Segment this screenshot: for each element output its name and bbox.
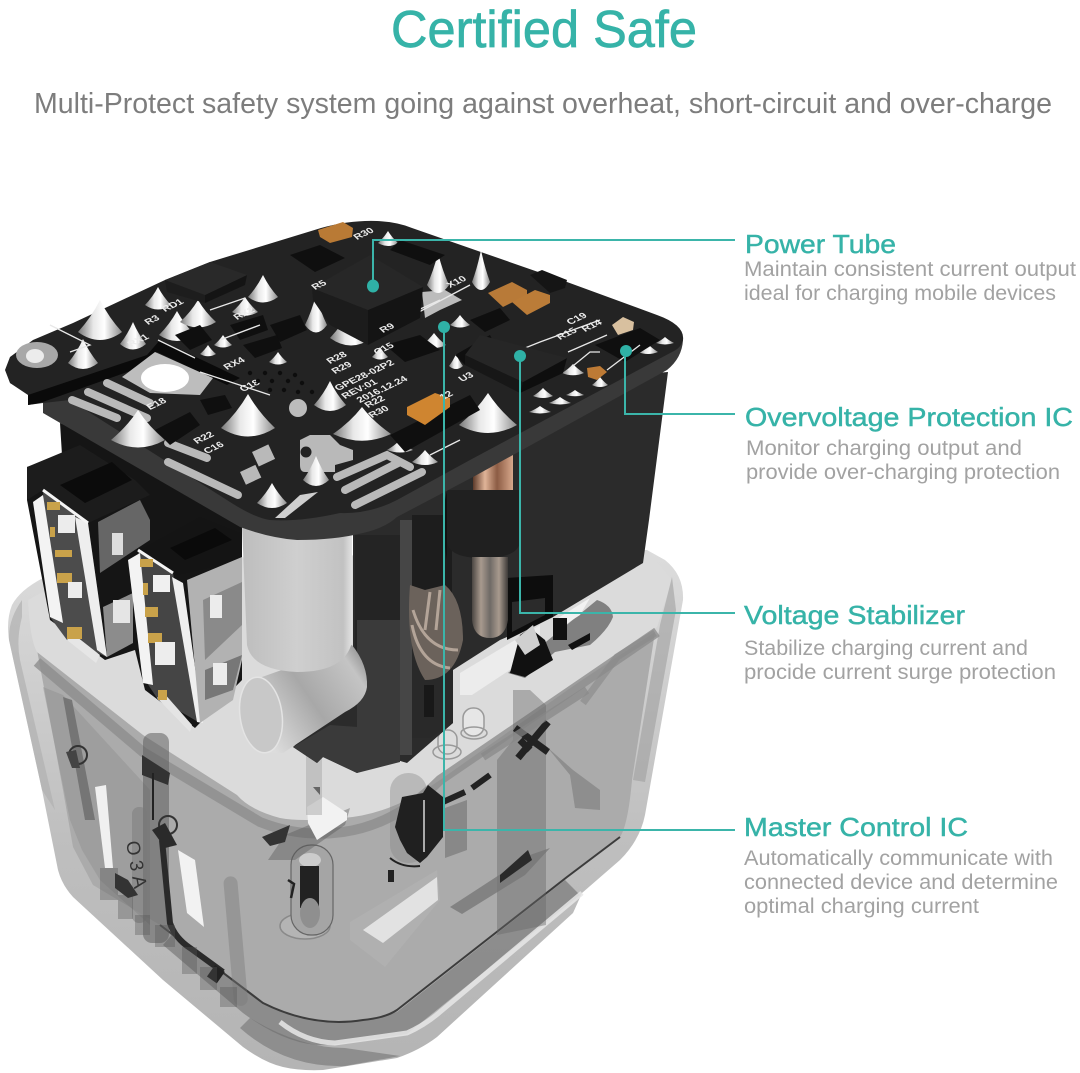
silver solder pads bbox=[16, 262, 462, 525]
circuit board bbox=[5, 221, 683, 540]
capacitor horizontal bbox=[235, 645, 367, 756]
callout: overvoltage protection IC bbox=[620, 345, 1073, 484]
black housing behind usb bbox=[27, 423, 242, 728]
silk labels: R28 bbox=[325, 350, 350, 366]
leader line: voltage stabilizer bbox=[520, 356, 735, 613]
leader line: power tube bbox=[373, 240, 735, 285]
silk labels: R5 bbox=[310, 279, 330, 292]
usb port 2 bbox=[128, 517, 242, 732]
body columns bbox=[293, 515, 553, 773]
shell left wall shading bbox=[9, 600, 55, 810]
capacitor vertical bbox=[242, 525, 352, 672]
silk labels bbox=[126, 226, 605, 456]
silk labels: GPE28-02P2 bbox=[333, 358, 397, 393]
chip: power tube bbox=[312, 255, 423, 345]
board top surface bbox=[5, 221, 683, 520]
silk labels: 2016.12.24 bbox=[355, 375, 411, 405]
silk labels: R22 bbox=[363, 394, 388, 410]
silk labels: R14 bbox=[580, 318, 605, 334]
silk labels: C19 bbox=[565, 311, 590, 327]
silk labels: RX4 bbox=[222, 356, 248, 372]
description: voltage stabilizer: Stabilize charging current and bbox=[744, 637, 1028, 660]
label: O3A mark: O3A bbox=[121, 839, 150, 890]
description: master control bbox=[744, 847, 1058, 918]
silk labels: R3 bbox=[143, 314, 163, 327]
silver cones bbox=[68, 222, 674, 508]
heading: overvoltage: Overvoltage Protection IC bbox=[745, 402, 1073, 432]
dot grid bbox=[248, 371, 314, 394]
silk labels: RX2 bbox=[232, 306, 258, 322]
silk labels: RX1 bbox=[126, 333, 152, 349]
leader line: overvoltage bbox=[625, 351, 735, 414]
slot bbox=[28, 340, 240, 405]
description: overvoltage: provide over-charging protection bbox=[746, 461, 1060, 484]
silk labels: R15 bbox=[555, 326, 580, 342]
dot: overvoltage bbox=[620, 345, 632, 357]
silk labels: C16 bbox=[202, 440, 227, 456]
description: power tube: Maintain consistent current output bbox=[744, 258, 1076, 281]
silk labels: 12 bbox=[438, 389, 456, 402]
description: master control: optimal charging current bbox=[744, 895, 979, 918]
heading: power tube: Power Tube bbox=[745, 229, 896, 259]
board edge bbox=[10, 300, 683, 540]
heading: master control: Master Control IC bbox=[744, 812, 968, 842]
shell right wall shading bbox=[633, 577, 676, 782]
chip: voltage stabilizer bbox=[465, 335, 567, 393]
dot: power tube bbox=[367, 280, 379, 292]
description: master control: Automatically communicate with bbox=[744, 847, 1053, 870]
orange capacitors bbox=[318, 222, 607, 425]
beige capacitor bbox=[612, 317, 634, 335]
silk labels: C15 bbox=[372, 341, 397, 357]
charger illustration bbox=[5, 221, 683, 1070]
silk labels: RD1 bbox=[160, 297, 187, 314]
shell rim bands bbox=[163, 880, 582, 1066]
shell internals bbox=[43, 625, 655, 1007]
description: power tube bbox=[744, 258, 1076, 305]
pin slot bbox=[280, 845, 333, 939]
copper coil bbox=[409, 455, 520, 680]
callout: power tube bbox=[367, 229, 1076, 305]
description: voltage stabilizer bbox=[744, 637, 1056, 684]
heading: voltage stabilizer: Voltage Stabilizer bbox=[744, 600, 965, 630]
small black components bbox=[155, 240, 660, 452]
title: Certified Safe bbox=[391, 1, 697, 59]
description: overvoltage bbox=[746, 437, 1060, 484]
description: master control: connected device and determine bbox=[744, 871, 1058, 894]
callout: voltage stabilizer bbox=[514, 350, 1056, 684]
silk labels: REV:01 bbox=[340, 378, 381, 401]
transparent outer shell bbox=[8, 550, 683, 1070]
silk labels: R30 bbox=[352, 226, 377, 242]
silk labels: X10 bbox=[445, 274, 470, 290]
silk labels: R30 bbox=[367, 404, 392, 420]
silk labels: R29 bbox=[330, 360, 355, 376]
subtitle: Multi-Protect safety system going against overheat, short-circuit and over-charge bbox=[34, 88, 1052, 120]
silk lines bbox=[50, 285, 640, 455]
shell clip bbox=[508, 598, 613, 678]
callout: master control IC bbox=[438, 321, 1058, 918]
description: overvoltage: Monitor charging output and bbox=[746, 437, 1022, 460]
plate band bbox=[37, 632, 657, 834]
description: voltage stabilizer: procide current surge protection bbox=[744, 661, 1056, 684]
chip: top left bbox=[165, 262, 247, 303]
chip: top right bbox=[530, 270, 567, 293]
silk labels: R22 bbox=[192, 430, 217, 446]
description: power tube: ideal for charging mobile devices bbox=[744, 282, 1056, 305]
silk labels: E18 bbox=[145, 396, 170, 412]
dot: voltage stabilizer bbox=[514, 350, 526, 362]
silk labels: U3 bbox=[457, 371, 477, 384]
silk labels: C18 bbox=[238, 378, 263, 394]
dot: master control bbox=[438, 321, 450, 333]
usb port 1 bbox=[27, 445, 150, 663]
leader line: master control bbox=[444, 327, 735, 830]
inner window bbox=[37, 632, 655, 1022]
silk labels: R9 bbox=[378, 322, 398, 335]
inner top plate bbox=[28, 550, 672, 820]
black main body bbox=[60, 372, 668, 773]
